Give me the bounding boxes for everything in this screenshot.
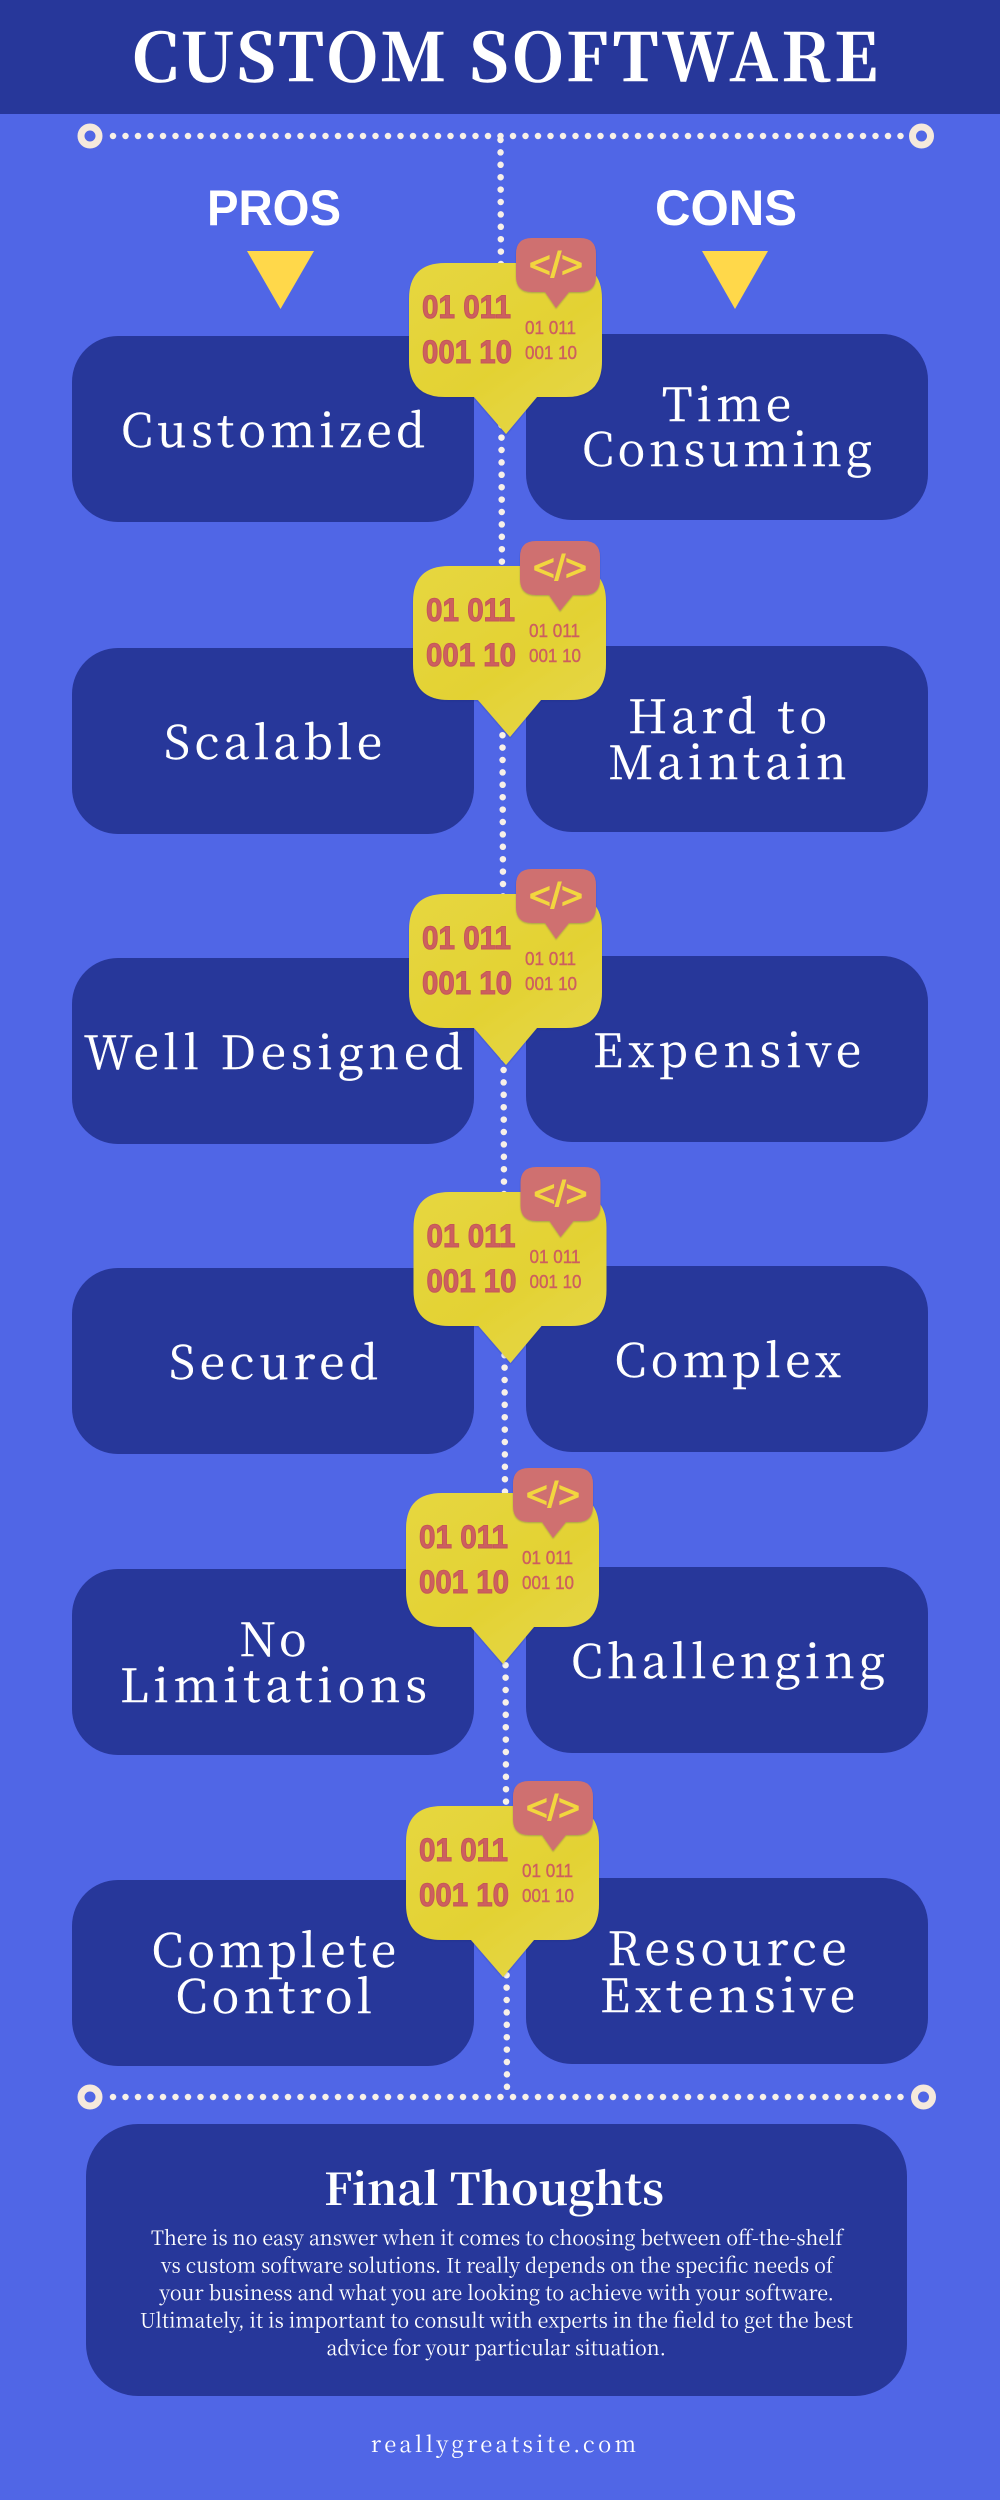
body text: Ultimately, it is important to consult with experts in the field to get the best <box>140 2304 854 2334</box>
dotted connector frame <box>81 127 932 2106</box>
icon: code bubble 5: 001 10 <box>522 1572 574 1593</box>
icon: code bubble 6: </> <box>526 1787 580 1828</box>
body text: vs custom software solutions. It really depends on the specific needs of <box>160 2250 836 2278</box>
icon: code bubble 4: </> <box>534 1173 588 1214</box>
row 2 con: Hard to Maintain: Maintain <box>608 727 846 793</box>
icon: code bubble 2: 01 011 <box>426 592 515 628</box>
icon: code bubble 3: 001 10 <box>422 965 512 1001</box>
icon: code bubble 1: 01 011 <box>422 289 511 325</box>
icon: code bubble 2: </> <box>533 547 587 588</box>
icon: code bubble 1: </> <box>529 244 583 285</box>
pros heading: PROS <box>207 180 341 236</box>
icon: code bubble 5: </> <box>526 1474 580 1515</box>
icon: code bubble 5: 001 10 <box>419 1564 509 1600</box>
cons heading <box>655 180 797 309</box>
row 5 con: Challenging <box>526 1567 928 1753</box>
row 2 con: Hard to Maintain: Hard to <box>628 681 827 747</box>
icon: code bubble 4: 01 011 <box>530 1246 580 1267</box>
row 4 con: Complex: Complex <box>614 1325 841 1391</box>
icon: code bubble 3 <box>409 869 602 1065</box>
icon: code bubble 6: 001 10 <box>419 1877 509 1913</box>
icon: code bubble 4: 01 011 <box>426 1218 516 1254</box>
row 4 pro: Secured <box>72 1268 474 1454</box>
icon: code bubble 4: 001 10 <box>530 1271 582 1292</box>
icon: code bubble 5 <box>406 1468 599 1664</box>
row 4 con: Complex <box>526 1266 928 1452</box>
body text <box>140 2222 854 2361</box>
body text: There is no easy answer when it comes to choosing between off-the-shelf <box>151 2222 845 2251</box>
icon: code bubble 6 <box>406 1781 599 1977</box>
row 6 pro: Complete Control: Control <box>176 1961 372 2027</box>
title: CUSTOM SOFTWARE <box>132 5 878 100</box>
icon: code bubble 1: 001 10 <box>422 334 512 370</box>
icon: code bubble 2: 001 10 <box>426 637 516 673</box>
row 1 pro: Customized <box>72 336 474 522</box>
icon: code bubble 1 <box>409 238 602 434</box>
icon: code bubble 3: </> <box>529 875 583 916</box>
icon: code bubble 5: 01 011 <box>522 1547 573 1568</box>
row 5 con: Challenging: Challenging <box>571 1626 885 1692</box>
row 3 pro: Well Designed <box>72 958 474 1144</box>
row 1 con: Time Consuming: Consuming <box>582 414 872 480</box>
row 6 con: Resource Extensive <box>526 1878 928 2064</box>
footer url: reallygreatsite.com <box>371 2428 636 2459</box>
icon: code bubble 3: 01 011 <box>422 920 511 956</box>
icon: code bubble 6: 001 10 <box>522 1885 574 1906</box>
icon: code bubble 4 <box>414 1167 606 1363</box>
icon: code bubble 2: 01 011 <box>529 620 580 641</box>
row 3 con: Expensive: Expensive <box>593 1015 861 1081</box>
row 2 pro: Scalable <box>72 648 474 834</box>
pros heading <box>207 180 341 309</box>
row 6 pro: Complete Control: Complete <box>152 1915 396 1981</box>
icon: code bubble 2: 001 10 <box>529 645 581 666</box>
row 6 con: Resource Extensive: Resource <box>608 1913 846 1979</box>
row 2 pro: Scalable: Scalable <box>164 707 382 773</box>
icon: code bubble 2 <box>413 541 606 737</box>
arrow: pros <box>247 251 314 309</box>
row 6 con: Resource Extensive: Extensive <box>600 1960 855 2026</box>
row 2 con: Hard to Maintain <box>526 646 928 832</box>
row 1 con: Time Consuming <box>526 334 928 520</box>
row 5 pro: No Limitations: No <box>240 1604 306 1670</box>
arrow: cons <box>702 251 768 309</box>
icon: code bubble 6: 01 011 <box>522 1860 573 1881</box>
row 5 pro: No Limitations <box>72 1569 474 1755</box>
body text: advice for your particular situation. <box>326 2332 666 2361</box>
icon: code bubble 4: 001 10 <box>426 1263 516 1299</box>
body text: your business and what you are looking to achieve with your software. <box>158 2277 834 2306</box>
icon: code bubble 3: 001 10 <box>525 973 577 994</box>
heading: final thoughts: Final Thoughts <box>324 2154 664 2218</box>
panel: final thoughts <box>86 2124 907 2396</box>
row 3 con: Expensive <box>526 956 928 1142</box>
row 6 pro: Complete Control <box>72 1880 474 2066</box>
icon: code bubble 1: 001 10 <box>525 342 577 363</box>
row 1 con: Time Consuming: Time <box>662 369 791 435</box>
icon: code bubble 3: 01 011 <box>525 948 576 969</box>
row 3 pro: Well Designed: Well Designed <box>84 1017 463 1083</box>
row 4 pro: Secured: Secured <box>169 1327 378 1393</box>
row 1 pro: Customized: Customized <box>121 395 425 461</box>
row 5 pro: No Limitations: Limitations <box>120 1650 427 1716</box>
cons heading: CONS <box>655 180 797 236</box>
icon: code bubble 6: 01 011 <box>419 1832 508 1868</box>
title banner <box>0 0 1000 114</box>
icon: code bubble 5: 01 011 <box>419 1519 508 1555</box>
icon: code bubble 1: 01 011 <box>525 317 576 338</box>
